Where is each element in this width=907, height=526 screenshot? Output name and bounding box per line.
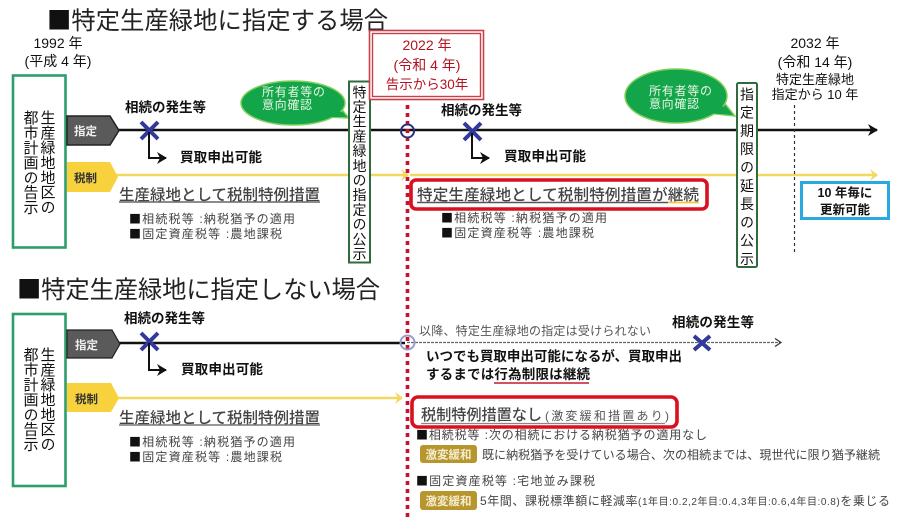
text: tax measures (top left): [119, 186, 320, 242]
text: inheritance tax detail: [416, 426, 880, 463]
panel: city planning notice (bottom): 生産緑地地区の: [38, 347, 56, 451]
box: designation notice: 特定生産緑地の指定の公示: [352, 85, 368, 261]
highlight: continued tax measures: 特定生産緑地として税制特例措置が継続: [417, 185, 699, 204]
event: inheritance 2: 買取申出可能: [504, 148, 586, 164]
marker: 2022 circle bottom: [400, 336, 414, 350]
tag: taxation (bottom): 税制: [75, 392, 98, 406]
tag: designation (bottom): 指定: [75, 338, 98, 352]
text: property tax detail: 激変緩和: [426, 494, 472, 508]
callout: owner intent 2: 意向確認: [649, 96, 699, 111]
tag: taxation (top): 税制: [74, 171, 97, 185]
event: inheritance 4: [672, 314, 754, 350]
main timeline arrow: designated: [118, 129, 877, 131]
callout: owner intent 2: 所有者等の: [649, 84, 712, 98]
dashed timeline after 2022: [407, 342, 781, 344]
title: designated case: ■特定生産緑地に指定する場合: [47, 1, 388, 36]
tag: taxation (bottom): [67, 383, 119, 412]
text: tax measures (bottom left): [119, 409, 320, 465]
title: not designated case: ■特定生産緑地に指定しない場合: [17, 270, 380, 305]
event: inheritance 1: 相続の発生等: [125, 99, 206, 115]
text: property tax detail: ■固定資産税等 :宅地並み課税: [416, 472, 595, 489]
tag: designation (bottom): [67, 330, 120, 358]
callout: owner intent 1: [241, 81, 349, 125]
label: 2032: 指定から 10 年: [772, 87, 858, 102]
highlight: no tax measures: (激変緩和措置あり): [545, 408, 669, 423]
box: renewal: [802, 182, 888, 218]
panel: city planning notice (bottom): [13, 314, 66, 486]
callout: owner intent 1: 意向確認: [262, 97, 312, 112]
event: inheritance 1: [125, 99, 262, 165]
label: 2032: [772, 35, 858, 102]
text: inheritance tax detail: ■相続税等 :次の相続における納税猶予の適用なし: [416, 426, 707, 443]
panel: city planning notice (top): 生産緑地地区の: [38, 110, 56, 214]
label: 2032: 2032 年: [790, 35, 840, 51]
highlight: no tax measures: 税制特例措置なし: [421, 407, 542, 424]
text: property tax detail: 5年間、課税標準額に軽減率(1年目:0.2,2年目:0.4,3年目:0.6,4年目:0.8)を乗じる: [480, 493, 890, 508]
label: 2032: (令和 14 年): [778, 54, 852, 70]
text: tax measures (top left): ■固定資産税等 :農地課税: [129, 225, 282, 242]
marker: 2032 dotted line: [794, 105, 796, 255]
panel: 2022 marker: [370, 30, 484, 100]
text: inheritance tax detail: 既に納税猶予を受けている場合、次の相続までは、現世代に限り猶予継続: [482, 447, 880, 462]
box: renewal: 10 年毎に: [818, 185, 872, 200]
text: purchase request any time: [426, 348, 682, 383]
label: 1992: (平成 4 年): [25, 53, 91, 69]
panel: city planning notice (top): 都市計画の告示: [22, 110, 38, 215]
text: tax measures (top right): [441, 209, 607, 241]
box: extension notice: 指定期限の延長の公示: [739, 87, 755, 270]
text: tax measures (top left): ■相続税等 :納税猶予の適用: [129, 210, 295, 227]
panel: 2022 marker: 2022 年: [402, 37, 452, 53]
callout: owner intent 1: 所有者等の: [262, 85, 325, 99]
tag: designation (top): 指定: [74, 124, 97, 138]
highlight: no tax measures: [412, 397, 677, 427]
panel: city planning notice (top): [13, 76, 66, 248]
panel: city planning notice (bottom): 都市計画の告示: [22, 347, 38, 452]
tag: taxation (top): [67, 162, 118, 192]
panel: 2022 marker: 告示から30年: [386, 77, 468, 92]
text: purchase request any time: いつでも買取申出可能になるが、買取申出: [426, 348, 682, 364]
tag: designation (top): [67, 116, 119, 145]
text: property tax detail: [416, 472, 890, 510]
text: purchase request any time: するまでは行為制限は継続: [426, 366, 590, 382]
event: inheritance 4: 相続の発生等: [672, 314, 754, 330]
event: inheritance 2: 相続の発生等: [441, 102, 522, 118]
text: tax measures (bottom left): ■固定資産税等 :農地課税: [129, 448, 282, 465]
highlight: continued tax measures: [411, 180, 707, 209]
label: 1992: 1992 年: [33, 35, 83, 51]
text: inheritance tax detail: 激変緩和: [426, 448, 472, 462]
tax timeline arrow: designated: [116, 174, 877, 176]
main timeline: not designated: [118, 342, 405, 344]
text: no more designation: 以降、特定生産緑地の指定は受けられない: [419, 323, 651, 338]
event: inheritance 2: [441, 102, 586, 164]
event: inheritance 3: [124, 310, 263, 377]
text: tax measures (bottom left): 生産緑地として税制特例措置: [119, 409, 320, 427]
text: tax measures (top right): ■固定資産税等 :農地課税: [441, 224, 594, 241]
marker: 2022 circle top: [401, 124, 414, 138]
label: 1992: [25, 35, 91, 69]
text: tax measures (top left): 生産緑地として税制特例措置: [119, 186, 320, 204]
text: tax measures (top right): ■相続税等 :納税猶予の適用: [441, 209, 607, 226]
event: inheritance 1: 買取申出可能: [180, 149, 262, 165]
marker: 2022 red dotted line: [406, 105, 409, 518]
text: tax measures (bottom left): ■相続税等 :納税猶予の適用: [129, 433, 295, 450]
panel: 2022 marker: (令和 4 年): [394, 57, 460, 73]
box: renewal: 更新可能: [820, 202, 870, 217]
callout: owner intent 2: [625, 69, 735, 123]
label: 2032: 特定生産緑地: [776, 72, 854, 87]
tax timeline arrow: not designated: [116, 397, 402, 399]
event: inheritance 3: 相続の発生等: [124, 310, 205, 326]
event: inheritance 3: 買取申出可能: [181, 361, 263, 377]
